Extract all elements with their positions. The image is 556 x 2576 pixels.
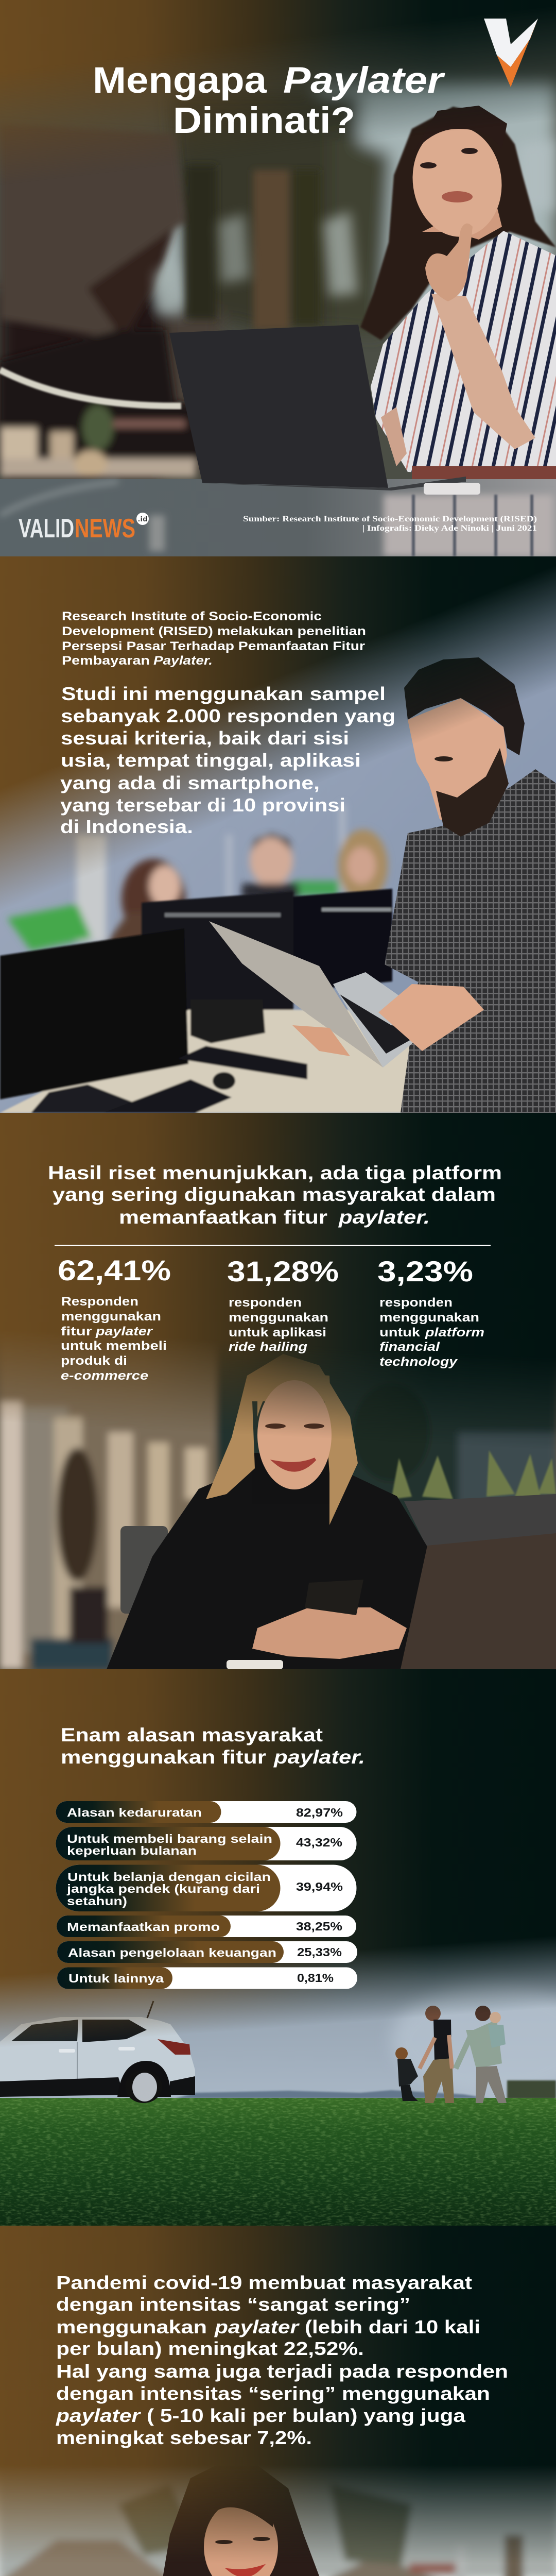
study text: sesuai kriteria, baik dari sisi xyxy=(61,727,349,749)
stat: financial technology: 3,23% xyxy=(377,1255,473,1287)
logo: Validnews: VALID xyxy=(19,514,74,544)
logo: Validnews: .id xyxy=(138,515,147,523)
source credit: | Infografis: Dieky Ade Ninoki | Juni 2021 xyxy=(362,524,537,533)
panel: hero title section xyxy=(0,0,556,556)
stat: financial technology: financial xyxy=(379,1340,441,1354)
title xyxy=(93,60,445,141)
stat: e-commerce: 62,41% xyxy=(58,1254,171,1286)
heading: paylater. xyxy=(273,1747,365,1768)
closing text: meningkat sebesar 7,2%. xyxy=(56,2427,312,2448)
title: Mengapa xyxy=(93,60,267,101)
stat: ride hailing: menggunakan xyxy=(229,1311,328,1325)
bar: Alasan pengelolaan keuangan xyxy=(57,1941,357,1963)
intro text: Paylater. xyxy=(153,654,213,668)
bar: Untuk belanja cicilan xyxy=(56,1865,356,1911)
bar: Untuk membeli barang: 43,32% xyxy=(296,1836,342,1849)
photo background: office and colleagues xyxy=(7,804,388,951)
top colour overlay xyxy=(0,1113,556,1440)
family walking xyxy=(395,2006,507,2103)
stat: ride hailing: untuk aplikasi xyxy=(229,1326,326,1340)
photo background: blurred resort and palms xyxy=(0,82,556,479)
sofa and chair xyxy=(120,1494,556,1614)
study text: usia, tempat tinggal, aplikasi xyxy=(61,750,361,771)
bar: Untuk belanja cicilan: 39,94% xyxy=(296,1880,343,1893)
heading: paylater. xyxy=(338,1207,430,1228)
plants xyxy=(391,1450,556,1499)
sky glow xyxy=(391,1984,556,2097)
closing text: dengan intensitas “sangat sering” xyxy=(56,2294,410,2315)
stat: e-commerce: untuk membeli xyxy=(61,1339,167,1353)
intro text xyxy=(62,609,366,668)
stat: e-commerce: fitur xyxy=(61,1325,92,1338)
logo: Validnews xyxy=(19,513,149,544)
heading: Hasil riset menunjukkan, ada tiga platform xyxy=(48,1162,502,1183)
stat: financial technology: menggunakan xyxy=(379,1311,479,1325)
stat: ride hailing: 31,28% xyxy=(227,1255,339,1287)
logo: Validnews: NEWS xyxy=(75,514,135,544)
bar: Untuk belanja cicilan: Untuk belanja dengan cicilan xyxy=(67,1870,271,1884)
top colour overlay xyxy=(0,0,556,156)
woman with phone and striped shirt xyxy=(133,2463,418,2576)
intro text: Persepsi Pasar Terhadap Pemanfaatan Fitur xyxy=(62,639,365,653)
bar: Untuk lainnya xyxy=(57,1967,357,1989)
bar: Memanfaatkan promo: Memanfaatkan promo xyxy=(67,1920,220,1934)
stat: e-commerce: Responden xyxy=(61,1295,138,1309)
stat: ride hailing xyxy=(227,1255,339,1354)
stat: financial technology: platform xyxy=(425,1326,484,1340)
stat: e-commerce: produk di xyxy=(61,1354,127,1368)
study text: di Indonesia. xyxy=(60,816,193,837)
heading: Enam alasan masyarakat xyxy=(61,1724,323,1745)
table reflections xyxy=(0,482,553,556)
woman with striped shirt xyxy=(360,106,556,479)
intro text: Research Institute of Socio-Economic xyxy=(62,609,322,623)
stat: e-commerce: menggunakan xyxy=(61,1310,161,1324)
title: Paylater xyxy=(283,60,445,101)
heading xyxy=(61,1724,365,1768)
intro text: Pembayaran xyxy=(62,654,150,668)
heading: menggunakan fitur xyxy=(61,1747,266,1768)
heading xyxy=(48,1162,502,1228)
bar: Alasan kedaruratan: 82,97% xyxy=(296,1806,343,1819)
bar: Alasan pengelolaan keuangan: 25,33% xyxy=(297,1945,342,1959)
study text xyxy=(60,683,395,837)
panel: research intro section xyxy=(0,556,556,1113)
top colour overlay xyxy=(0,1669,556,2045)
table xyxy=(0,479,556,556)
heading: memanfaatkan fitur xyxy=(119,1207,327,1228)
stat: financial technology xyxy=(377,1255,484,1369)
closing text: Hal yang sama juga terjadi pada responden xyxy=(56,2361,508,2382)
study text: Studi ini menggunakan sampel xyxy=(61,683,386,704)
laptop xyxy=(401,1533,556,1669)
stat: ride hailing: ride hailing xyxy=(229,1340,307,1354)
closing text: menggunakan xyxy=(56,2316,207,2337)
bar: Untuk belanja cicilan: setahun) xyxy=(67,1894,127,1908)
study text: yang tersebar di 10 provinsi xyxy=(60,794,345,816)
woman with phone xyxy=(107,1354,429,1669)
closing text: dengan intensitas “sering” menggunakan xyxy=(56,2383,490,2404)
top colour overlay xyxy=(0,2226,556,2576)
rope xyxy=(0,370,181,406)
intro text: Development (RISED) melakukan penelitian xyxy=(62,624,366,638)
closing text: paylater xyxy=(56,2405,141,2426)
man with laptop xyxy=(209,657,556,1113)
heading: yang sering digunakan masyarakat dalam xyxy=(53,1184,496,1205)
bar: Untuk membeli barang: Untuk membeli barang selain xyxy=(67,1832,272,1845)
bar: Untuk membeli barang xyxy=(56,1827,356,1860)
closing text: paylater xyxy=(214,2316,300,2337)
top colour overlay xyxy=(0,556,556,905)
bar: Untuk lainnya: 0,81% xyxy=(297,1971,334,1985)
bar: Untuk belanja cicilan: jangka pendek (kurang dari xyxy=(66,1882,260,1895)
title: Diminati? xyxy=(173,100,355,141)
horizon hills and trees xyxy=(175,2080,556,2099)
stat: financial technology: technology xyxy=(379,1355,458,1369)
closing text: (lebih dari 10 kali xyxy=(305,2316,480,2337)
bar: Alasan kedaruratan: Alasan kedaruratan xyxy=(67,1806,202,1819)
panel: pandemic closing section xyxy=(0,2226,556,2576)
car xyxy=(0,2001,195,2103)
photo background: thatched hut and garden xyxy=(0,124,319,477)
bar: Alasan pengelolaan keuangan: Alasan pengelolaan keuangan xyxy=(68,1946,276,1959)
photo background: cafe windows xyxy=(0,1309,556,1669)
closing text: ( 5-10 kali per bulan) yang juga xyxy=(147,2405,466,2426)
source credit: Sumber: Research Institute of Socio-Economic Development (RISED) xyxy=(243,515,537,523)
bar: Memanfaatkan promo: 38,25% xyxy=(296,1920,342,1933)
stat: e-commerce xyxy=(58,1254,171,1383)
bar: Alasan kedaruratan xyxy=(56,1801,356,1823)
laptop xyxy=(169,325,466,490)
closing text: per bulan) meningkat 22,52%. xyxy=(56,2338,364,2359)
source credit xyxy=(243,515,537,533)
closing text xyxy=(56,2272,508,2448)
stat: ride hailing: responden xyxy=(229,1296,302,1310)
closing text: Pandemi covid-19 membuat masyarakat xyxy=(56,2272,472,2293)
study text: sebanyak 2.000 responden yang xyxy=(61,705,395,726)
desk with monitors and keyboards xyxy=(0,889,412,1113)
bar: Untuk lainnya: Untuk lainnya xyxy=(68,1972,164,1985)
stat: financial technology: untuk xyxy=(379,1326,421,1340)
stat: e-commerce: e-commerce xyxy=(61,1369,148,1383)
photo background: beach huts and palms xyxy=(0,2463,556,2576)
stat: financial technology: responden xyxy=(379,1296,453,1310)
panel: six reasons section xyxy=(0,1669,556,2226)
stat: e-commerce: paylater xyxy=(95,1325,153,1338)
bar: Untuk membeli barang: keperluan bulanan xyxy=(67,1844,197,1857)
icon: V logo xyxy=(484,19,538,87)
bar: Memanfaatkan promo xyxy=(57,1916,356,1937)
phone on table xyxy=(424,483,480,495)
study text: yang ada di smartphone, xyxy=(60,772,320,793)
photo background: sky between palms xyxy=(154,139,556,314)
panel: platform statistics section xyxy=(0,1113,556,1669)
shirt reflection stripes xyxy=(412,495,533,556)
grass field xyxy=(0,2098,556,2226)
